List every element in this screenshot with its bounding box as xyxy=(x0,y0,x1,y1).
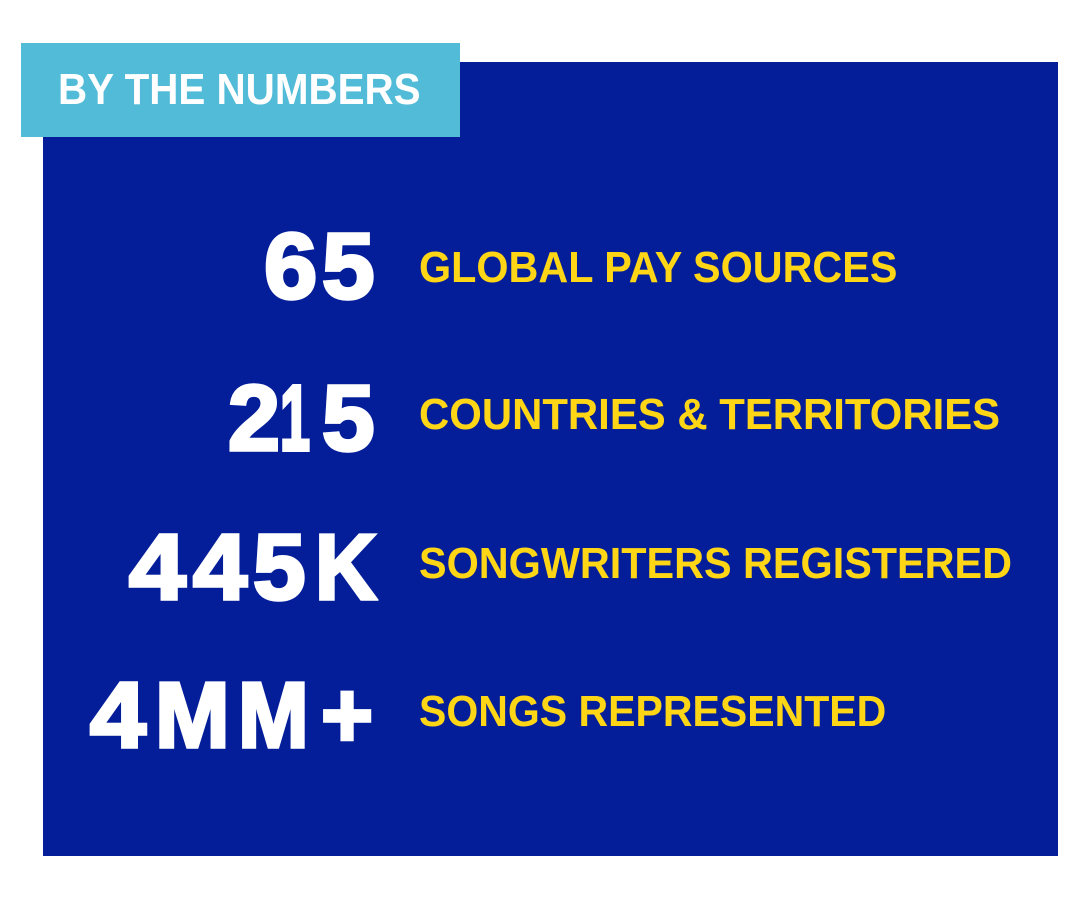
stat number: 65 xyxy=(264,214,374,318)
stat number: 445K: K xyxy=(315,515,376,619)
stat number: 4MM+: + xyxy=(321,663,373,767)
stat number: 445K xyxy=(128,515,378,619)
heading banner xyxy=(21,43,460,137)
stat number: 445K: 5 xyxy=(253,515,306,619)
stat number: 4MM+: M xyxy=(155,663,230,767)
stat number: 445K: 4 xyxy=(129,515,186,619)
stat number: 445K: 4 xyxy=(193,515,247,619)
stat label: countries and territories: COUNTRIES & TERRITORIES xyxy=(419,391,1000,439)
stat number: 215 xyxy=(228,366,374,470)
stat number: 65: 5 xyxy=(322,214,374,318)
stat number: 215: 2 xyxy=(228,366,280,470)
stat number: 215: 1 xyxy=(280,366,310,470)
stat label: global pay sources: GLOBAL PAY SOURCES xyxy=(419,244,897,292)
stat number: 65: 6 xyxy=(264,214,317,318)
stat number: 4MM+: 4 xyxy=(90,663,145,767)
heading text: BY THE NUMBERS xyxy=(58,66,421,114)
stat label: songs represented: SONGS REPRESENTED xyxy=(419,688,886,736)
stat number: 4MM+ xyxy=(90,663,373,767)
stat number: 215: 5 xyxy=(322,366,374,470)
stat number: 4MM+: M xyxy=(238,663,309,767)
stat label: songwriters registered: SONGWRITERS REGISTERED xyxy=(419,540,1012,588)
